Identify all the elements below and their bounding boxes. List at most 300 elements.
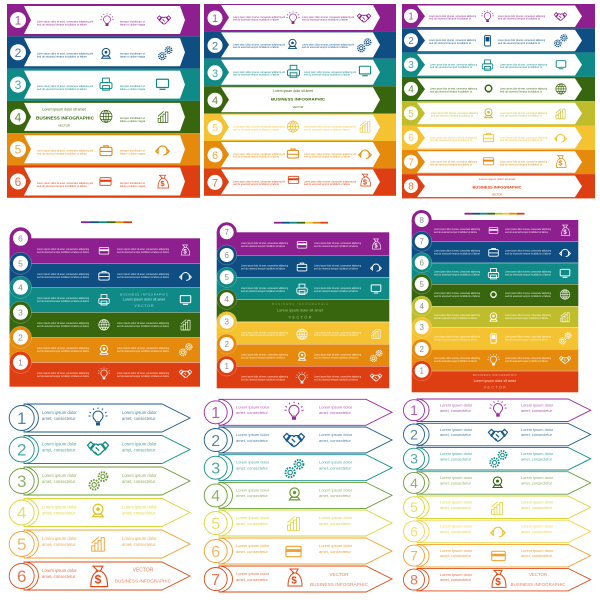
- row 5: Lorem ipsum dolor sit amet, consectetur adipiscing: [431, 112, 479, 115]
- row 2: sed do eiusmod tempor incididunt ut labore: [505, 360, 549, 363]
- row 4: Lorem ipsum dolor: [319, 487, 353, 492]
- row 5: 5: [211, 516, 220, 533]
- row 7: VECTOR: [329, 572, 349, 577]
- row 7: BUSINESS INFOGRAPHIC: [310, 582, 369, 587]
- row 7: [404, 544, 591, 567]
- row 5: tempor incididunt ut: [120, 149, 145, 152]
- row 5: [10, 252, 200, 288]
- row 4: [9, 498, 190, 526]
- row 5: sed do eiusmod tempor incididunt ut labore: [37, 152, 88, 155]
- row 3: labore et dolore magna: [120, 88, 146, 91]
- row 3: sed do eiusmod tempor incididunt ut: [430, 66, 472, 69]
- row 2: Lorem ipsum dolor: [236, 432, 270, 437]
- row 3: 3: [419, 323, 424, 332]
- row 5: Lorem ipsum dolor sit amet, consectetur adipiscing elit: [37, 149, 93, 152]
- row 5: sed do eiusmod tempor incididunt ut labore: [241, 290, 286, 293]
- row 4: [412, 296, 578, 327]
- row 4: 4: [211, 488, 220, 505]
- row 2: sed do eiusmod tempor incididunt ut labore et dolore: [117, 350, 170, 353]
- row 5: amet, consectetur: [521, 505, 553, 510]
- row 1: sed do eiusmod tempor incididunt ut labore: [302, 19, 349, 22]
- row 4: [404, 472, 591, 494]
- row 5: sed do eiusmod tempor incididunt ut labore: [304, 128, 351, 131]
- row 4: Lorem ipsum dolor sit amet, consectetur adipiscing: [37, 297, 90, 300]
- row 6: [10, 227, 200, 264]
- row 5: 5: [18, 258, 23, 268]
- row 4: Lorem ipsum dolor sit amet, consectetur adipiscing: [505, 314, 552, 317]
- row 2: Lorem ipsum dolor: [319, 432, 353, 437]
- panel: seven-step outline arrows: [204, 399, 392, 592]
- row 1: 1: [211, 405, 220, 422]
- row 5: Lorem ipsum dolor: [521, 500, 554, 504]
- row 1: 1: [17, 409, 26, 428]
- row 4: VECTOR: [293, 105, 304, 109]
- row 7: Lorem ipsum dolor sit amet, consectetur adipiscing: [500, 161, 548, 164]
- row 4: [10, 276, 200, 312]
- panel: six-step outline arrows: [9, 404, 190, 590]
- row 4: sed do eiusmod tempor incididunt ut labore: [434, 317, 478, 320]
- row 3: Lorem ipsum dolor sit amet, consectetur adipiscing: [500, 63, 548, 66]
- row 7: 7: [212, 177, 218, 189]
- row 7: Lorem ipsum dolor: [440, 548, 473, 553]
- row 1: [217, 356, 389, 388]
- row 3: Lorem ipsum dolor: [521, 451, 554, 456]
- row 3: 3: [211, 461, 220, 478]
- row 7: amet, consectetur: [521, 553, 553, 558]
- row 6: [204, 141, 396, 168]
- row 1: Lorem ipsum dolor sit amet, consectetur adipiscing elit: [302, 16, 354, 19]
- row 2: [7, 36, 200, 69]
- row 6: [404, 520, 591, 543]
- row 5: 5: [17, 535, 26, 554]
- row 1: 1: [408, 12, 414, 23]
- row 4: sed do eiusmod tempor incididunt ut labore: [505, 317, 549, 320]
- row 1: amet, consectetur: [122, 416, 156, 421]
- row 1: [404, 399, 591, 422]
- row 8: sed do eiusmod tempor incididunt ut labore: [505, 231, 549, 234]
- row 3: [10, 301, 200, 338]
- row 2: [217, 334, 389, 366]
- row 2: [204, 31, 396, 59]
- row 5: sed do eiusmod tempor incididunt ut labore: [314, 290, 359, 293]
- row 6: Lorem ipsum dolor: [521, 524, 554, 529]
- row 3: Lorem ipsum dolor: [236, 460, 270, 465]
- panel: eight-step outline arrows: [404, 399, 591, 591]
- row 5: amet, consectetur: [42, 542, 76, 547]
- row 2: Lorem ipsum dolor sit amet, consectetur adipiscing: [37, 347, 90, 350]
- row 3: [404, 448, 591, 470]
- row 6: Lorem ipsum dolor sit amet, consectetur adipiscing elit: [37, 182, 93, 185]
- row 3: Lorem ipsum dolor: [42, 473, 77, 478]
- row 1: Lorem ipsum dolor sit amet, consectetur adipiscing: [241, 376, 289, 379]
- row 4: Lorem ipsum dolor sit amet, consectetur adipiscing: [430, 88, 478, 91]
- row 6: Lorem ipsum dolor sit amet, consectetur adipiscing: [434, 271, 481, 274]
- row 3: sed do eiusmod tempor incididunt ut labore: [505, 338, 549, 341]
- row 6: amet, consectetur: [42, 574, 76, 579]
- row 1: Lorem ipsum dolor sit amet, consectetur adipiscing: [498, 15, 546, 18]
- row 3: sed do eiusmod tempor incididunt ut labore et dolore: [37, 325, 90, 328]
- row 8: [404, 568, 591, 591]
- row 3: amet, consectetur: [236, 466, 268, 471]
- row 6: Lorem ipsum dolor: [440, 524, 473, 529]
- row 3: amet, consectetur: [319, 466, 351, 471]
- row 1: amet, consectetur: [42, 416, 76, 421]
- row 5: Lorem ipsum dolor: [42, 536, 77, 541]
- row 3: sed do eiusmod tempor incididunt ut labore et dolore: [117, 325, 170, 328]
- row 2: Lorem ipsum dolor: [42, 442, 77, 447]
- row 5: [217, 267, 389, 299]
- row 1: Lorem ipsum dolor sit amet, consectetur adipiscing elit: [37, 20, 93, 23]
- row 4: amet, consectetur: [236, 493, 268, 498]
- row 2: [9, 436, 190, 464]
- row 4: VECTOR: [134, 304, 154, 308]
- row 5: 5: [224, 273, 229, 282]
- row 3: Lorem ipsum dolor sit amet, consectetur adipiscing: [117, 322, 170, 325]
- row 1: [402, 4, 595, 28]
- row 5: amet, consectetur: [236, 521, 268, 526]
- row 3: sed do eiusmod tempor incididunt ut labore: [314, 334, 359, 337]
- row 3: Lorem ipsum dolor sit amet, consectetur adipiscing elit: [233, 71, 285, 74]
- row 5: Lorem ipsum dolor sit amet, consectetur adipiscing: [117, 273, 170, 276]
- row 5: sed do eiusmod tempor incididunt ut labore et dolore: [117, 276, 170, 279]
- row 4: Lorem ipsum dolor: [521, 475, 554, 480]
- row 4: 4: [212, 95, 218, 107]
- row 5: 5: [419, 280, 424, 289]
- row 7: [402, 150, 595, 174]
- row 5: 5: [410, 499, 418, 515]
- row 1: Lorem ipsum dolor sit amet, consectetur adipiscing elit: [233, 16, 285, 19]
- row 2: amet, consectetur: [440, 432, 472, 437]
- row 2: Lorem ipsum dolor: [440, 427, 473, 432]
- row 4: BUSINESS INFOGRAPHIC: [120, 292, 169, 296]
- row 5: amet, consectetur: [122, 542, 156, 547]
- row 7: 7: [224, 228, 229, 237]
- row 2: labore et dolore magna: [120, 56, 146, 59]
- panel: seven-step ribbon arrows: [204, 4, 396, 196]
- row 1: sed do eiusmod tempor incididunt ut: [498, 18, 540, 20]
- row 2: tempor incididunt ut: [120, 53, 145, 56]
- row 5: Lorem ipsum dolor: [440, 500, 473, 504]
- row 5: Lorem ipsum dolor: [236, 515, 270, 520]
- row 6: Lorem ipsum dolor sit amet, consectetur adipiscing: [430, 136, 478, 139]
- row 1: 1: [15, 14, 22, 28]
- row 1: Lorem ipsum dolor: [319, 404, 353, 409]
- row 6: sed do eiusmod tempor incididunt ut labore et dolore: [117, 251, 170, 254]
- row 2: 2: [15, 46, 22, 60]
- row 5: sed do eiusmod tempor incididunt ut labore: [434, 295, 481, 298]
- row 4: Lorem ipsum dolor sit amet: [123, 297, 165, 301]
- row 7: Lorem ipsum dolor: [236, 571, 270, 576]
- row 3: Lorem ipsum dolor sit amet, consectetur adipiscing: [314, 331, 362, 334]
- row 6: 6: [419, 259, 424, 268]
- row 7: Lorem ipsum dolor sit amet, consectetur adipiscing: [505, 249, 552, 252]
- row 1: Lorem ipsum dolor sit amet, consectetur adipiscing: [314, 376, 362, 379]
- row 4: 4: [224, 295, 229, 304]
- row 1: sed do eiusmod tempor incididunt ut labore et dolore: [37, 375, 90, 378]
- row 2: [402, 28, 595, 53]
- row 6: 6: [211, 544, 220, 561]
- panel: seven-step stacked tabs: [217, 222, 389, 388]
- row 6: amet, consectetur: [521, 529, 553, 534]
- row 2: amet, consectetur: [236, 438, 268, 443]
- row 4: labore et dolore magna: [120, 120, 146, 123]
- row 6: sed do eiusmod tempor incididunt ut labore: [304, 156, 351, 159]
- row 1: [10, 351, 200, 387]
- row 3: 3: [15, 78, 22, 92]
- row 3: 3: [410, 451, 418, 467]
- row 1: [204, 399, 392, 425]
- row 1: Lorem ipsum dolor sit amet, consectetur adipiscing: [37, 372, 90, 375]
- panel: six-step ribbon arrows: [7, 4, 200, 198]
- row 6: sed do eiusmod tempor incididunt ut labore et dolore: [37, 251, 90, 254]
- row 6: tempor incididunt ut: [120, 182, 145, 185]
- row 4: amet, consectetur: [122, 510, 156, 515]
- row 2: sed do eiusmod tempor incididunt ut: [498, 42, 540, 45]
- row 1: Lorem ipsum dolor: [42, 410, 77, 415]
- row 7: 7: [211, 572, 220, 589]
- row 7: sed do eiusmod tempor incididunt ut labore: [241, 245, 286, 248]
- row 8: Lorem ipsum dolor: [440, 572, 473, 577]
- row 4: amet, consectetur: [521, 481, 553, 486]
- row 5: [402, 101, 595, 126]
- row 7: sed do eiusmod tempor incididunt ut labore: [314, 245, 359, 248]
- row 5: Lorem ipsum dolor sit amet, consectetur adipiscing: [314, 287, 362, 290]
- row 5: 5: [212, 123, 218, 135]
- row 2: Lorem ipsum dolor: [521, 427, 554, 432]
- row 1: 1: [212, 13, 218, 25]
- row 1: 1: [410, 402, 418, 418]
- row 2: Lorem ipsum dolor sit amet, consectetur adipiscing: [498, 39, 546, 42]
- row 7: sed do eiusmod tempor incididunt ut labore: [233, 183, 280, 186]
- row 6: BUSINESS INFOGRAPHIC: [115, 578, 172, 584]
- row 3: amet, consectetur: [521, 456, 553, 461]
- row 4: 4: [408, 85, 414, 96]
- row 5: labore et dolore magna: [120, 152, 146, 155]
- row 6: Lorem ipsum dolor sit amet, consectetur adipiscing elit: [304, 153, 356, 156]
- row 6: amet, consectetur: [236, 549, 268, 554]
- row 5: [9, 530, 190, 558]
- row 7: Lorem ipsum dolor sit amet, consectetur adipiscing: [430, 161, 478, 164]
- row 4: amet, consectetur: [319, 493, 351, 498]
- row 5: Lorem ipsum dolor sit amet, consectetur adipiscing: [37, 273, 90, 276]
- row 8: 8: [408, 182, 414, 193]
- row 6: VECTOR: [133, 568, 154, 574]
- row 8: 8: [419, 216, 424, 225]
- row 6: 6: [410, 523, 418, 539]
- header colour bar: [274, 222, 328, 224]
- row 7: sed do eiusmod tempor incididunt ut labore: [505, 252, 552, 255]
- row 6: Lorem ipsum dolor sit amet, consectetur adipiscing: [500, 136, 548, 139]
- row 5: [204, 114, 396, 141]
- row 6: Lorem ipsum dolor: [42, 568, 77, 573]
- panel: eight-step stacked tabs: [412, 210, 578, 392]
- row 3: sed do eiusmod tempor incididunt ut labore: [304, 74, 351, 76]
- row 7: [204, 168, 396, 196]
- row 1: amet, consectetur: [521, 408, 553, 413]
- row 6: Lorem ipsum dolor sit amet, consectetur adipiscing: [117, 248, 170, 251]
- row 6: Lorem ipsum dolor sit amet, consectetur adipiscing: [505, 271, 552, 274]
- row 4: [204, 482, 392, 508]
- row 6: sed do eiusmod tempor incididunt ut labore: [37, 185, 88, 188]
- row 7: [412, 231, 578, 263]
- row 3: sed do eiusmod tempor incididunt ut labore: [241, 334, 286, 337]
- row 1: Lorem ipsum dolor: [521, 402, 554, 408]
- panel: six-step stacked tabs: [10, 221, 200, 387]
- row 3: Lorem ipsum dolor sit amet, consectetur adipiscing: [505, 335, 552, 338]
- row 6: [204, 538, 392, 564]
- row 2: sed do eiusmod tempor incididunt ut labore: [233, 46, 280, 49]
- row 7: Lorem ipsum dolor sit amet, consectetur adipiscing: [314, 242, 362, 245]
- row 7: [217, 222, 389, 255]
- row 4: BUSINESS INFOGRAPHIC: [36, 115, 95, 120]
- row 8: [412, 210, 578, 241]
- row 3: [217, 312, 389, 344]
- row 6: [402, 126, 595, 150]
- row 4: BUSINESS INFOGRAPHIC: [272, 302, 329, 306]
- row 7: [204, 566, 392, 592]
- row 3: sed do eiusmod tempor incididunt ut labore: [233, 74, 280, 76]
- row 2: Lorem ipsum dolor sit amet, consectetur adipiscing: [505, 357, 552, 360]
- row 1: 1: [419, 367, 424, 376]
- row 3: [204, 455, 392, 481]
- row 2: [404, 423, 591, 446]
- row 3: Lorem ipsum dolor sit amet, consectetur adipiscing: [434, 335, 481, 338]
- row 4: Lorem ipsum dolor sit amet: [273, 89, 313, 93]
- row 6: sed do eiusmod tempor incididunt ut: [500, 139, 542, 142]
- row 4: BUSINESS INFOGRAPHIC: [271, 97, 325, 102]
- header colour bar: [81, 221, 132, 223]
- row 4: [402, 77, 595, 101]
- row 7: sed do eiusmod tempor incididunt ut: [430, 163, 472, 166]
- row 6: sed do eiusmod tempor incididunt ut labore: [314, 268, 359, 270]
- row 2: Lorem ipsum dolor sit amet, consectetur adipiscing elit: [37, 53, 93, 56]
- row 6: sed do eiusmod tempor incididunt ut labore: [505, 274, 552, 277]
- row 7: amet, consectetur: [236, 577, 268, 582]
- row 2: 2: [18, 332, 23, 342]
- row 8: sed do eiusmod tempor incididunt ut labore: [434, 231, 478, 234]
- row 1: BUSINESS INFOGRAPHIC: [473, 373, 517, 377]
- row 5: amet, consectetur: [440, 505, 472, 510]
- row 2: Lorem ipsum dolor sit amet, consectetur adipiscing: [117, 347, 170, 350]
- row 8: [402, 174, 595, 198]
- row 4: Lorem ipsum dolor: [440, 475, 473, 480]
- row 1: sed do eiusmod tempor incididunt ut labore: [37, 23, 88, 26]
- row 2: 2: [410, 426, 418, 442]
- row 1: Lorem ipsum dolor: [236, 404, 270, 409]
- row 3: [9, 467, 190, 495]
- row 4: 4: [17, 504, 26, 523]
- row 1: sed do eiusmod tempor incididunt ut labore: [233, 19, 280, 22]
- row 3: 3: [212, 68, 218, 80]
- row 2: Lorem ipsum dolor sit amet, consectetur adipiscing elit: [302, 43, 354, 46]
- row 6: Lorem ipsum dolor sit amet, consectetur adipiscing: [314, 265, 362, 268]
- row 3: 3: [18, 307, 23, 317]
- row 5: sed do eiusmod tempor incididunt ut labore: [233, 128, 280, 131]
- row 1: VECTOR: [484, 386, 506, 390]
- row 7: Lorem ipsum dolor sit amet, consectetur adipiscing: [241, 242, 289, 245]
- row 6: sed do eiusmod tempor incididunt ut labore: [233, 156, 280, 159]
- row 2: sed do eiusmod tempor incididunt ut labore et dolore: [37, 350, 90, 353]
- row 8: BUSINESS INFOGRAPHIC: [510, 582, 566, 587]
- row 1: Lorem ipsum dolor: [122, 410, 157, 415]
- row 2: amet, consectetur: [42, 447, 76, 452]
- row 6: Lorem ipsum dolor sit amet, consectetur adipiscing elit: [233, 153, 285, 156]
- row 4: Lorem ipsum dolor sit amet, consectetur adipiscing: [500, 88, 548, 91]
- row 5: Lorem ipsum dolor sit amet, consectetur adipiscing: [241, 287, 289, 290]
- row 4: VECTOR: [58, 123, 70, 127]
- row 2: Lorem ipsum dolor sit amet, consectetur adipiscing: [241, 354, 289, 357]
- row 7: Lorem ipsum dolor: [521, 548, 554, 553]
- row 5: [7, 133, 200, 166]
- row 3: 3: [17, 472, 26, 491]
- row 3: amet, consectetur: [440, 456, 472, 461]
- row 1: Lorem ipsum dolor sit amet: [474, 379, 516, 383]
- row 4: [204, 86, 396, 114]
- row 2: 2: [224, 340, 229, 349]
- row 1: Lorem ipsum dolor sit amet, consectetur adipiscing: [117, 372, 170, 375]
- row 1: [9, 404, 190, 432]
- row 1: 1: [224, 362, 229, 371]
- row 5: [412, 274, 578, 306]
- row 3: amet, consectetur: [122, 479, 156, 484]
- row 6: amet, consectetur: [319, 549, 351, 554]
- row 2: amet, consectetur: [122, 447, 156, 452]
- row 1: [204, 4, 396, 31]
- row 2: Lorem ipsum dolor sit amet, consectetur adipiscing: [429, 39, 477, 42]
- row 5: Lorem ipsum dolor: [319, 515, 353, 520]
- row 6: sed do eiusmod tempor incididunt ut: [430, 139, 472, 142]
- row 4: [217, 289, 389, 322]
- row 3: [402, 53, 595, 77]
- row 3: sed do eiusmod tempor incididunt ut labore: [37, 88, 88, 91]
- row 6: 6: [15, 175, 22, 189]
- row 8: VECTOR: [529, 572, 547, 577]
- row 4: amet, consectetur: [440, 481, 472, 486]
- row 6: amet, consectetur: [440, 529, 472, 534]
- row 8: Lorem ipsum dolor sit amet: [479, 177, 515, 181]
- row 7: Lorem ipsum dolor sit amet, consectetur adipiscing elit: [304, 180, 356, 183]
- row 4: 4: [419, 302, 424, 311]
- row 3: Lorem ipsum dolor sit amet, consectetur adipiscing: [241, 331, 289, 334]
- row 7: 7: [410, 548, 418, 564]
- row 2: Lorem ipsum dolor sit amet, consectetur adipiscing: [314, 354, 362, 357]
- row 6: [9, 562, 190, 590]
- row 4: 4: [15, 110, 22, 124]
- row 3: Lorem ipsum dolor: [440, 451, 473, 456]
- row 6: sed do eiusmod tempor incididunt ut labore: [434, 274, 481, 277]
- row 7: Lorem ipsum dolor sit amet, consectetur adipiscing elit: [233, 180, 285, 183]
- row 6: 6: [408, 133, 414, 144]
- row 2: [412, 339, 578, 371]
- row 3: [204, 59, 396, 86]
- row 7: amet, consectetur: [440, 553, 472, 558]
- row 3: Lorem ipsum dolor sit amet, consectetur adipiscing elit: [304, 71, 356, 74]
- row 1: amet, consectetur: [236, 410, 268, 415]
- row 4: 4: [18, 282, 23, 292]
- row 2: [204, 427, 392, 453]
- panel: eight-step ribbon arrows: [402, 4, 595, 198]
- row 2: sed do eiusmod tempor incididunt ut labore: [37, 56, 88, 59]
- row 4: Lorem ipsum dolor sit amet: [277, 308, 324, 312]
- row 6: 6: [224, 251, 229, 260]
- row 5: 5: [408, 109, 414, 120]
- row 6: 6: [212, 150, 218, 162]
- row 6: Lorem ipsum dolor: [319, 543, 353, 548]
- row 5: [204, 510, 392, 536]
- row 8: 8: [410, 572, 418, 588]
- row 4: Lorem ipsum dolor sit amet, consectetur adipiscing: [434, 314, 481, 317]
- row 3: 3: [408, 60, 414, 71]
